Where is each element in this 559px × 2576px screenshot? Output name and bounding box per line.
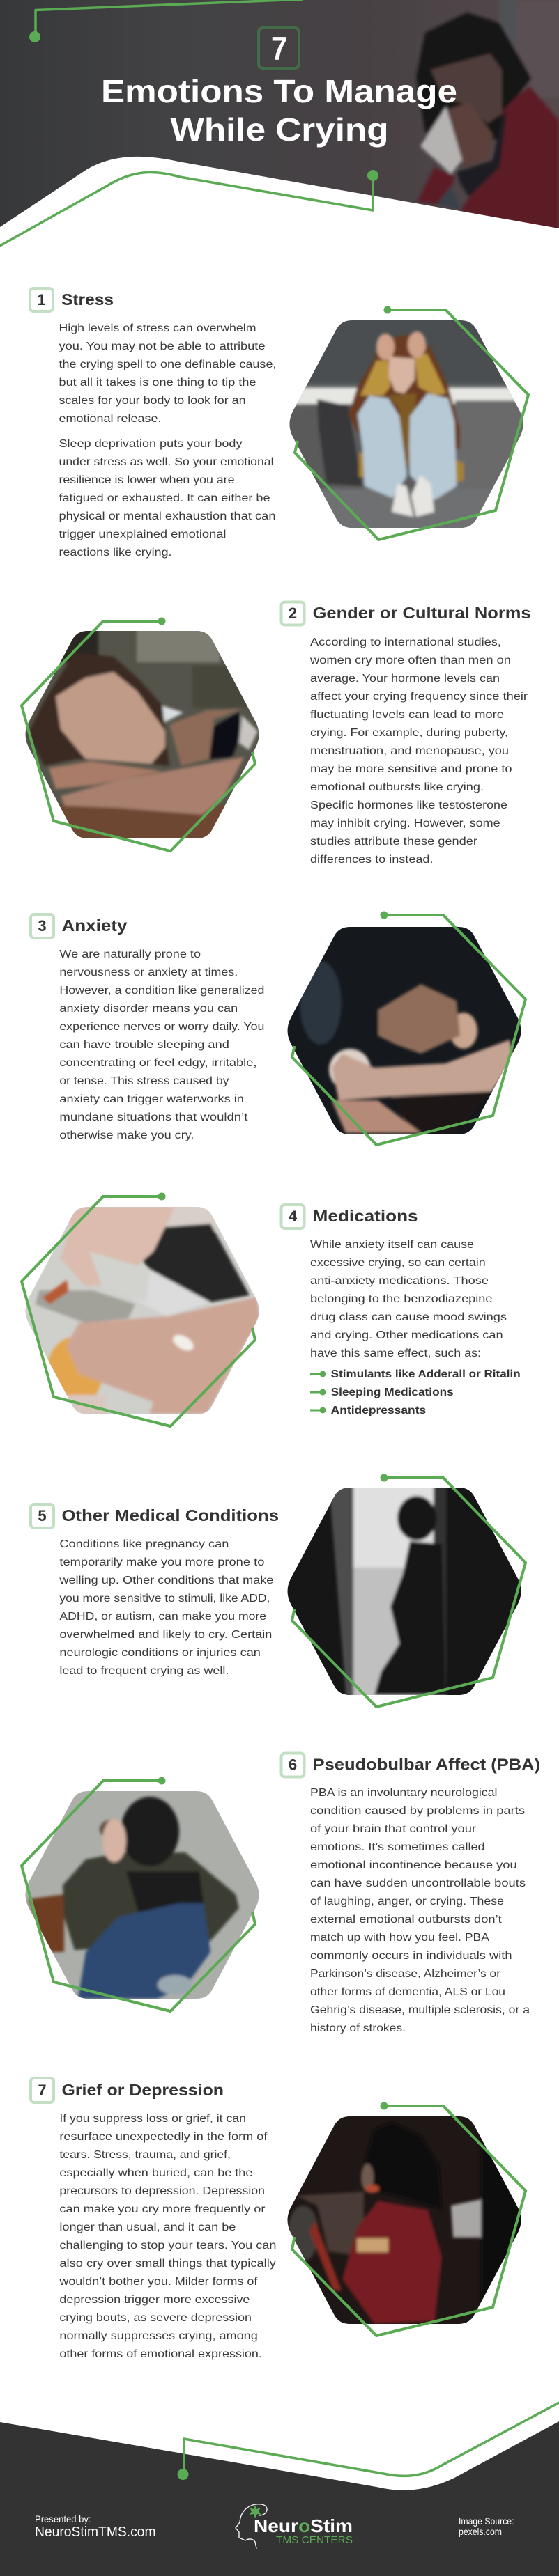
text: medications body: While anxiety itself can cause — [310, 1239, 474, 1251]
text: other conditions body: you more sensitive to stimuli, like ADD, — [59, 1593, 270, 1605]
list arrow 1 — [310, 1371, 326, 1377]
text: gender body: may be more sensitive and prone to — [310, 763, 512, 775]
title: Emotions To Manage — [101, 73, 457, 109]
hexagon outline with dot — [22, 1777, 255, 2011]
text: PBA body: Parkinson’s disease, Alzheimer’s or — [310, 1968, 501, 1980]
panel: 1 stress — [30, 288, 533, 559]
number badge 4: 4 — [289, 1208, 298, 1225]
logo subline: TMS CENTERS — [276, 2534, 353, 2546]
heading: grief or depression: Grief or Depression — [61, 2081, 224, 2099]
footer line with dot — [177, 2402, 559, 2480]
text: stress body: but all it takes is one thing to tip the — [59, 377, 256, 389]
panel: 7 grief or depression — [31, 2078, 528, 2360]
text: gender body: affect your crying frequency since their — [310, 691, 528, 703]
text: anxiety body: or tense. This stress caused by — [59, 1075, 229, 1087]
text: gender body — [309, 637, 528, 866]
text: other conditions body: overwhelmed and likely to cry. Certain — [59, 1629, 272, 1641]
text: gender body: fluctuating levels can lead to more — [310, 709, 504, 721]
hexagon outline with dot — [292, 911, 526, 1145]
heading: gender or cultural norms: Gender or Cultural Norms — [313, 604, 531, 622]
text: gender body: emotional outbursts like crying. — [310, 781, 484, 793]
text: stress body: reactions like crying. — [59, 547, 171, 559]
text: anxiety body: concentrating or feel edgy, irritable, — [59, 1057, 256, 1069]
panel: 3 anxiety — [31, 911, 528, 1145]
text: PBA body: Gehrig’s disease, multiple sclerosis, or a — [310, 2004, 530, 2016]
photo: woman holding her head — [22, 1788, 266, 2004]
text: PBA body: history of strokes. — [310, 2022, 406, 2034]
number badge 6: 6 — [289, 1756, 297, 1773]
header top line with dot — [29, 0, 303, 42]
number badge 3: 3 — [38, 917, 47, 935]
text: other conditions body: lead to frequent crying as well. — [59, 1665, 229, 1677]
header white curve — [0, 157, 559, 252]
hexagon outline with dot — [22, 1192, 255, 1426]
text: medications body: have this same effect, such as: — [310, 1348, 481, 1359]
text: stress body: fatigued or exhausted. It can either be — [59, 492, 270, 504]
text: stress body: High levels of stress can overwhelm — [59, 322, 256, 334]
text: stress body: under stress as well. So your emotional — [59, 456, 273, 468]
text: medications body: belonging to the benzodiazepine — [310, 1293, 493, 1305]
text: gender body: studies attribute these gender — [310, 836, 478, 848]
text: other conditions body: ADHD, or autism, can make you more — [59, 1611, 266, 1623]
text: grief body: tears. Stress, trauma, and grief, — [59, 2149, 231, 2161]
text: stress body — [59, 322, 276, 559]
number badge 5: 5 — [38, 1507, 47, 1524]
number badge 5 — [31, 1504, 54, 1528]
text: stress body: scales for your body to look for an — [59, 395, 245, 407]
image source: Image Source: — [459, 2516, 514, 2527]
text: anxiety body: However, a condition like generalized — [59, 985, 264, 997]
number badge 4 — [282, 1205, 304, 1228]
image source — [459, 2516, 514, 2537]
text: grief body: depression trigger more excessive — [59, 2294, 250, 2306]
text: grief body: precursors to depression. Depression — [59, 2185, 265, 2197]
presented by: NeuroStimTMS.com — [35, 2524, 156, 2540]
text: grief body: normally suppresses crying, among — [59, 2330, 258, 2342]
number badge 2: 2 — [289, 604, 297, 622]
text: gender body: Specific hormones like testosterone — [310, 799, 507, 811]
list arrow 2 — [310, 1389, 326, 1396]
text: grief body: other forms of emotional expression. — [59, 2348, 262, 2360]
text: stress body: physical or mental exhaustion that can — [59, 510, 276, 522]
number badge 1 — [30, 288, 53, 311]
text: stress body: the crying spell to one definable cause, — [59, 359, 276, 370]
header photo: woman crying into a tissue — [0, 0, 559, 251]
text: PBA body: emotions. It’s sometimes called — [310, 1841, 485, 1853]
photo: silhouette of pregnant woman — [284, 1484, 528, 1700]
text: gender body: average. Your hormone levels can — [310, 673, 500, 685]
text: stress body: resilience is lower when you are — [59, 474, 235, 486]
footer dark curved background — [0, 2421, 559, 2576]
text: gender body: women cry more often than men on — [309, 655, 511, 666]
panel: 2 gender or cultural norms — [22, 602, 531, 866]
number badge 3 — [31, 914, 54, 938]
text: grief body: crying bouts, as severe depression — [59, 2312, 252, 2324]
logo wordmark: NeuroStim — [254, 2515, 353, 2536]
panel: 4 medications — [22, 1192, 521, 1426]
logo head outline — [236, 2504, 267, 2549]
text: PBA body: condition caused by problems in parts — [310, 1805, 525, 1817]
footer — [0, 2402, 559, 2576]
image source: pexels.com — [459, 2527, 502, 2537]
text: PBA body: of laughing, anger, or crying. These — [310, 1896, 504, 1907]
text: gender body: may inhibit crying. However, some — [310, 818, 500, 829]
text: gender body: According to international studies, — [310, 637, 501, 648]
number badge 2 — [282, 602, 304, 625]
text: other conditions body: welling up. Other conditions that make — [59, 1575, 274, 1586]
text: gender body: menstruation, and menopause, you — [310, 745, 509, 757]
list item 1: Stimulants like Adderall or Ritalin — [331, 1368, 521, 1380]
text: other conditions body: Conditions like pregnancy can — [59, 1538, 229, 1550]
text: grief body: If you suppress loss or grief, it can — [59, 2113, 246, 2125]
text: stress body: you. You may not be able to attribute — [59, 341, 266, 352]
header number badge: 7 — [271, 30, 287, 67]
list item 3: Antidepressants — [331, 1405, 426, 1416]
text: anxiety body: anxiety disorder means you can — [59, 1003, 238, 1015]
heading: stress: Stress — [61, 290, 114, 309]
text: anxiety body: can have trouble sleeping and — [59, 1039, 229, 1051]
hexagon outline with dot — [292, 2102, 526, 2336]
panel: 5 other medical conditions — [31, 1474, 528, 1707]
panel: 6 pseudobulbar affect — [22, 1754, 540, 2034]
text: stress body: emotional release. — [59, 413, 162, 425]
heading: pseudobulbar affect: Pseudobulbar Affect (PBA) — [313, 1755, 540, 1773]
number badge 7 — [31, 2078, 54, 2102]
number badge 7: 7 — [38, 2082, 47, 2099]
text: PBA body: of your brain that control your — [310, 1823, 477, 1835]
list item 2: Sleeping Medications — [331, 1387, 454, 1398]
text: anxiety body: otherwise make you cry. — [59, 1130, 194, 1141]
text: PBA body: PBA is an involuntary neurological — [310, 1787, 498, 1799]
text: other conditions body: neurologic conditions or injuries can — [59, 1647, 261, 1659]
presented by: Presented by: — [35, 2513, 91, 2524]
text: PBA body: can have sudden uncontrollable bouts — [310, 1878, 526, 1889]
number badge 6 — [282, 1754, 304, 1777]
header number badge — [259, 28, 299, 68]
text: grief body: can make you cry more frequently or — [59, 2203, 266, 2215]
text: anxiety body: mundane situations that wouldn’t — [59, 1111, 248, 1123]
heading: medications: Medications — [313, 1207, 418, 1225]
text: grief body: also cry over small things that typically — [59, 2258, 276, 2270]
presented by — [35, 2513, 156, 2540]
hexagon outline with dot — [295, 306, 528, 540]
text: medications body — [310, 1239, 507, 1359]
number badge 1: 1 — [37, 291, 46, 309]
photo: woman in red hoodie — [284, 2113, 528, 2329]
logo star — [250, 2505, 261, 2518]
text: PBA body: commonly occurs in individuals with — [310, 1950, 512, 1962]
text: PBA body: emotional incontinence because you — [310, 1859, 517, 1871]
photo: woman resting head on arms — [22, 627, 266, 843]
header lower line with dot — [0, 170, 378, 247]
photo: woman on sofa — [290, 320, 523, 528]
text: gender body: differences to instead. — [310, 854, 434, 866]
text: anxiety body: nervousness or anxiety at times. — [59, 967, 238, 978]
title: While Crying — [170, 111, 389, 148]
text: grief body: longer than usual, and it can be — [59, 2222, 236, 2233]
text: grief body: challenging to stop your tears. You can — [59, 2240, 276, 2251]
text: PBA body: external emotional outbursts don’t — [310, 1914, 502, 1926]
text: anxiety body — [59, 949, 264, 1141]
photo: woman with dark hair looking down — [284, 923, 528, 1139]
text: medications body: drug class can cause mood swings — [310, 1311, 507, 1323]
title — [101, 73, 457, 148]
text: stress body: Sleep deprivation puts your body — [59, 438, 243, 450]
text: medications body: excessive crying, so can certain — [310, 1257, 486, 1269]
text: anxiety body: anxiety can trigger waterworks in — [59, 1093, 244, 1105]
text: anxiety body: experience nerves or worry daily. You — [59, 1021, 264, 1033]
text: medications body: anti-anxiety medications. Those — [310, 1275, 489, 1287]
hexagon outline with dot — [22, 617, 255, 851]
heading: other medical conditions: Other Medical Conditions — [61, 1506, 279, 1524]
logo: NeuroStim TMS Centers — [236, 2504, 353, 2549]
text: PBA body: match up with how you feel. PBA — [310, 1932, 489, 1944]
text: grief body — [59, 2113, 276, 2360]
text: PBA body — [310, 1787, 530, 2034]
text: gender body: crying. For example, during puberty, — [310, 727, 508, 739]
list: medication types — [310, 1368, 521, 1416]
text: other conditions body: temporarily make you more prone to — [59, 1556, 265, 1568]
text: stress body: trigger unexplained emotional — [59, 529, 226, 540]
heading: anxiety: Anxiety — [61, 916, 128, 935]
text: other conditions body — [59, 1538, 274, 1677]
text: grief body: especially when buried, can be the — [59, 2167, 253, 2179]
text: anxiety body: We are naturally prone to — [59, 949, 201, 960]
text: grief body: wouldn’t bother you. Milder forms of — [59, 2276, 258, 2288]
list arrow 3 — [310, 1407, 326, 1414]
text: medications body: and crying. Other medications can — [310, 1329, 503, 1341]
text: PBA body: other forms of dementia, ALS or Lou — [310, 1986, 505, 1998]
photo: hands pouring a pill — [22, 1203, 266, 1419]
header: dark photo banner — [0, 0, 559, 252]
hexagon outline with dot — [292, 1474, 526, 1707]
text: grief body: resurface unexpectedly in the form of — [59, 2131, 268, 2143]
